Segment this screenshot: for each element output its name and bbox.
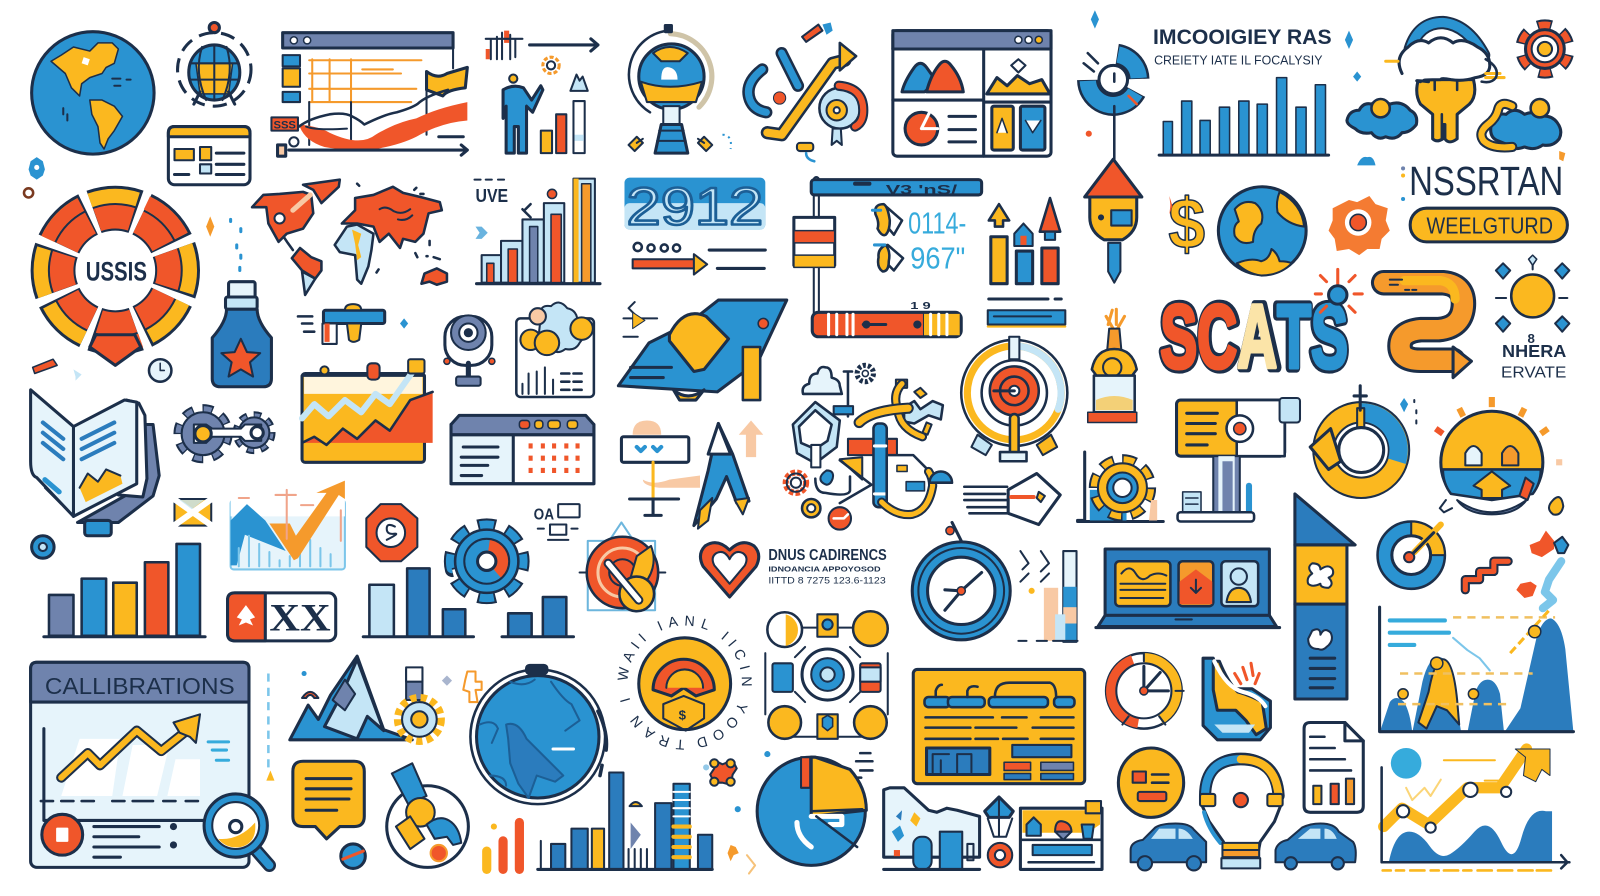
icon: city buildings bbox=[884, 788, 980, 869]
chart: stepped bars with UVE label bbox=[474, 179, 600, 284]
text: DNUS CADIRENCS heading: DNUS CADIRENCS bbox=[768, 547, 887, 564]
icon: small decorations left bbox=[24, 157, 241, 381]
icon: skyline bars bbox=[487, 751, 770, 874]
icon: sun with diamonds: ERVATE bbox=[1501, 365, 1566, 382]
icon: right car bbox=[1276, 824, 1356, 869]
panel: browser calendar bbox=[451, 415, 594, 484]
panel: rising zigzag area chart bbox=[302, 359, 433, 462]
heading: NSSRTAN label and button: NSSRTAN bbox=[1409, 158, 1563, 204]
icon: smiling sun face bbox=[1436, 397, 1563, 520]
heading: NSSRTAN label and button bbox=[1401, 151, 1567, 242]
title text: IMCOOIGIEY RAS bbox=[1153, 25, 1332, 49]
icon: mountains with gear bbox=[290, 656, 482, 741]
icon: mirror camera bbox=[444, 315, 495, 386]
icon: light bulb bbox=[1200, 754, 1283, 868]
icon: globe on stand bbox=[629, 26, 731, 153]
icon: network of gears bbox=[786, 365, 952, 530]
icon: small globe with dashed ring bbox=[178, 22, 251, 106]
panel: XX card: XX bbox=[269, 597, 331, 640]
panel: bracket device with figures: 967" bbox=[910, 241, 965, 275]
icon: dollar sign: $ bbox=[1168, 184, 1205, 264]
chart: yellow trend over blue area bbox=[1382, 748, 1569, 870]
panel: small browser window bbox=[1020, 801, 1102, 869]
chart: area with rising orange arrow bbox=[231, 481, 345, 569]
subtitle text: CREIETY IATE IL FOCALYSIY bbox=[1154, 52, 1323, 67]
icon: info card bbox=[168, 127, 250, 185]
icon: plate with tickets bbox=[341, 763, 468, 868]
panel: bracket device with figures bbox=[794, 180, 982, 337]
panel: yellow data sheet bbox=[913, 669, 1085, 784]
icon: winding road arrow bbox=[1384, 280, 1471, 378]
icon: yellow donut with pointer bbox=[1310, 386, 1416, 488]
card title: CALLIBRATIONS bbox=[45, 673, 235, 699]
icon: envelope badge bbox=[174, 499, 211, 526]
panel: USSIS segmented wheel bbox=[16, 171, 215, 370]
panel: 2912 year banner: 2912 bbox=[627, 178, 763, 237]
icon: yellow round label bbox=[1118, 748, 1184, 817]
panel: bracket device with figures: 1 9 bbox=[910, 301, 931, 312]
icon: earth globe bbox=[32, 32, 154, 154]
icon: gear with bars frame bbox=[1078, 452, 1163, 521]
icon: gauge badge with ring text: $ bbox=[679, 707, 687, 722]
icon: bottle with star bbox=[212, 282, 271, 387]
wheel label: USSIS bbox=[86, 257, 147, 287]
icon: molecule bbox=[710, 759, 737, 786]
icon: document with bars bbox=[1304, 722, 1363, 812]
icon: blue mortarboard with yellow shield bbox=[618, 300, 787, 400]
chart: five bar chart bbox=[44, 544, 205, 637]
icon: dial pendulum with house pin bbox=[1078, 10, 1148, 283]
text: DNUS CADIRENCS heading bbox=[768, 547, 887, 586]
panel: clouds data card bbox=[516, 303, 594, 397]
icon: yellow and blue globe bbox=[1218, 187, 1306, 276]
icon: presenter with bars bbox=[486, 31, 598, 153]
chart: blue mountain peaks bbox=[1380, 607, 1573, 733]
panel: browser window with chart: SSS bbox=[273, 120, 296, 132]
icon: dashed divider bbox=[266, 674, 274, 781]
icon: billboard on post bbox=[1177, 398, 1300, 521]
text: OA mini icon: OA bbox=[534, 506, 554, 523]
icon: gauge badge with ring text: TRAN I WAII IANL IICIN YOOD bbox=[618, 616, 752, 750]
chart: small stacked steps bbox=[1018, 551, 1078, 642]
icon: target gauge bbox=[1378, 521, 1445, 589]
icon: red hexagon coin bbox=[366, 504, 417, 561]
icon: magnifier bbox=[204, 794, 269, 865]
panel: XX card bbox=[228, 593, 336, 641]
icon: small clock bbox=[149, 359, 171, 382]
icon: dartboard with pin bbox=[580, 522, 665, 611]
diagram: circular hub network bbox=[765, 611, 888, 739]
icon: rising arrow bars bbox=[988, 198, 1065, 327]
text: SCATS large lettering: SCATS bbox=[1160, 287, 1348, 387]
trend arrow bbox=[61, 727, 192, 778]
icon: yellow seat shape bbox=[1203, 658, 1270, 740]
icon: sun with diamonds: 8 bbox=[1528, 331, 1535, 346]
icon: clouds and lightbulb bbox=[1345, 22, 1561, 165]
icon: speedy arrow pentagon bbox=[964, 474, 1060, 525]
icon: zigzag arrows bbox=[1465, 531, 1568, 608]
icon: timer dial bbox=[1106, 653, 1184, 729]
icon: blue gear with donut bbox=[443, 518, 530, 605]
panel: browser window with chart bbox=[271, 33, 467, 156]
icon: speech bubble bbox=[293, 761, 364, 839]
icon: curved arrow with target bbox=[748, 22, 863, 161]
icon: torch bottle bbox=[1088, 309, 1137, 422]
icon: sun with diamonds bbox=[1496, 255, 1569, 382]
panel: laptop dashboard bbox=[1096, 549, 1280, 628]
panel: 2912 year banner bbox=[624, 178, 765, 275]
chart: stepped bars with UVE label: UVE bbox=[476, 185, 508, 206]
icon: heart bbox=[700, 543, 759, 597]
panel: CALLIBRATIONS report card bbox=[31, 662, 249, 867]
icon: concentric target bbox=[961, 337, 1067, 461]
icon: stopwatch ring bbox=[912, 522, 1010, 640]
text: SCATS large lettering: SCATS bbox=[1160, 287, 1348, 387]
text: DNUS CADIRENCS heading: IITTD 8 7275 123.6-1123 bbox=[768, 576, 886, 586]
chart: paired bars bbox=[363, 568, 573, 637]
bar chart bbox=[1163, 78, 1326, 155]
icon: orange flower gear bbox=[1329, 196, 1390, 255]
icon: hot air balloon bbox=[985, 797, 1013, 867]
panel: bracket device with figures: V3 'nS/ bbox=[886, 182, 958, 197]
icon: orange pie bbox=[757, 753, 872, 865]
icon: speech board and letter A figure bbox=[621, 420, 763, 529]
icon: red world map bbox=[252, 180, 447, 295]
panel: dashboard window bbox=[893, 31, 1051, 156]
heading: NSSRTAN label and button: WEELGTURD bbox=[1427, 213, 1553, 239]
icon: small blue virus bbox=[1315, 269, 1362, 312]
icon: left car bbox=[1131, 824, 1206, 870]
button bbox=[1410, 208, 1567, 242]
figures: 0114- bbox=[908, 207, 966, 241]
icon: ring token bbox=[32, 536, 54, 558]
panel: tall tower bbox=[1295, 494, 1355, 699]
icon: sun with diamonds: NHERA bbox=[1502, 341, 1567, 361]
icon: open book bbox=[31, 390, 159, 536]
icon: orange gear bbox=[1518, 23, 1571, 76]
icon: twin gears bbox=[180, 410, 270, 457]
text: DNUS CADIRENCS heading: IDNOANCIA APPOYOSOD bbox=[768, 565, 881, 573]
icon: tool with lines bbox=[298, 304, 408, 344]
icon: large blue world globe bbox=[470, 665, 606, 804]
heading: top-right title and bars bbox=[1153, 25, 1332, 155]
text: OA mini icon bbox=[534, 504, 580, 540]
